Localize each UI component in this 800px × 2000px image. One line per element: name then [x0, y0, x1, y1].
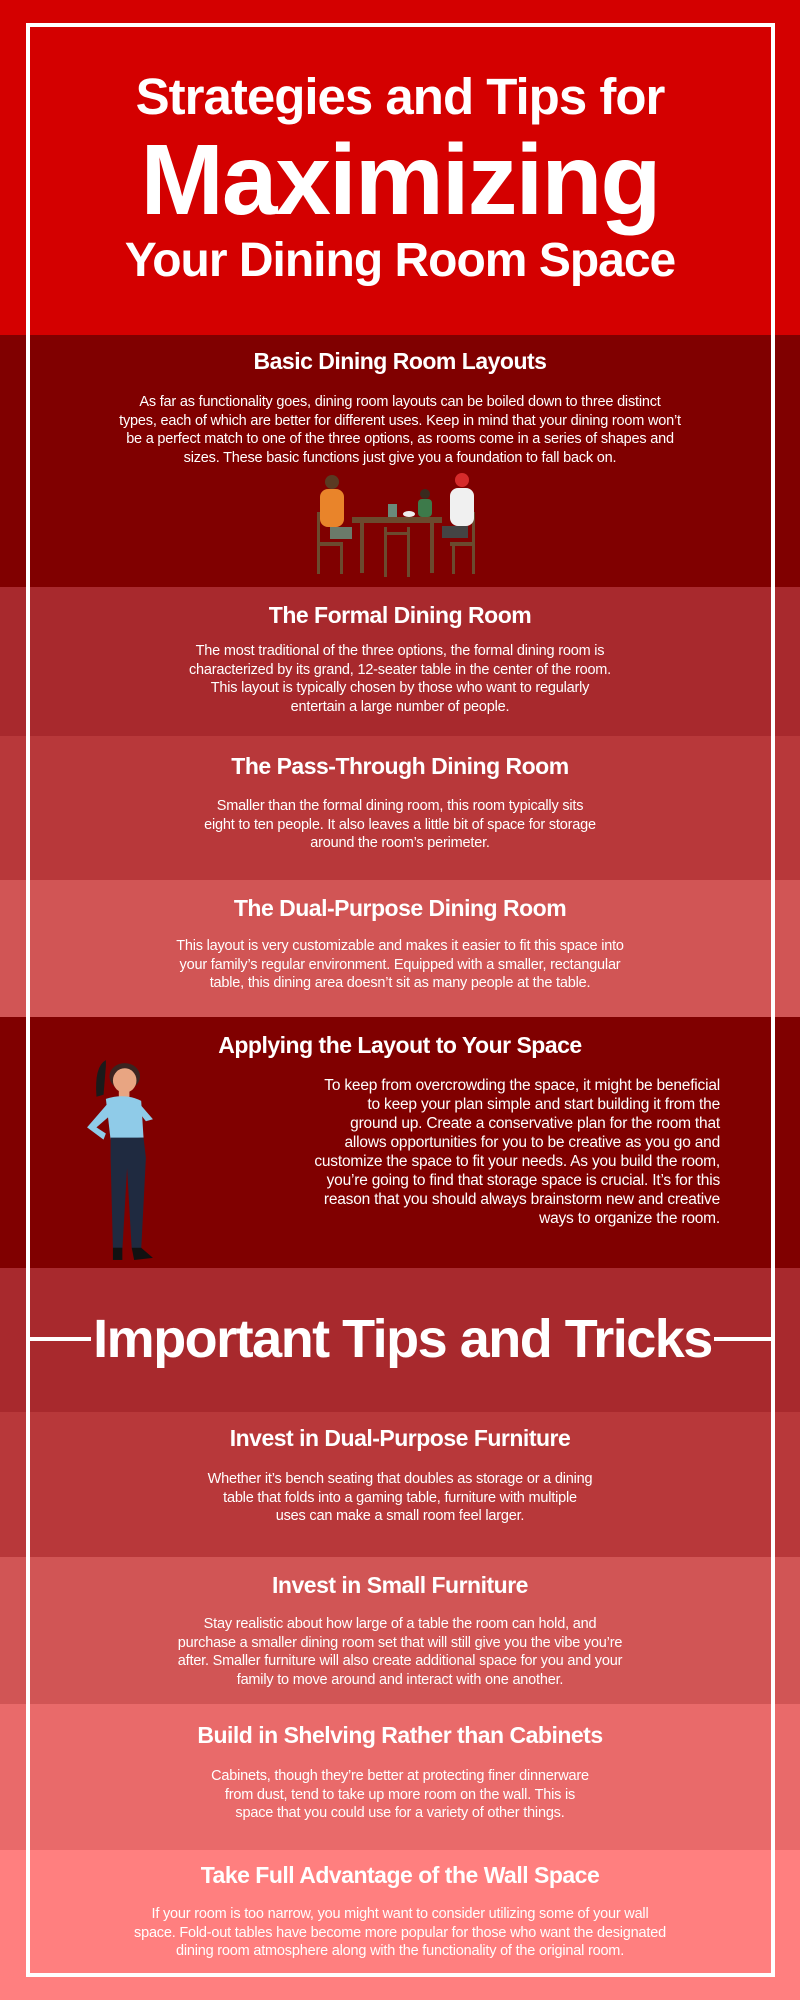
- text: basic layouts: be a perfect match to one of the three options, as rooms come in a series of shapes and: [126, 431, 674, 447]
- text: formal: [189, 643, 611, 715]
- text: dual-purpose: This layout is very customizable and makes it easier to fit this space into: [176, 938, 624, 954]
- text: wall space: dining room atmosphere along with the functionality of the original room.: [176, 1943, 624, 1959]
- title: Strategies and Tips for: [136, 68, 664, 125]
- illustration: family dining: [317, 473, 475, 577]
- text: formal: entertain a large number of people.: [291, 699, 509, 715]
- section title: important tips: Important Tips and Tricks: [93, 1309, 712, 1369]
- text: small furniture: [178, 1616, 622, 1688]
- text: formal: This layout is typically chosen by those who want to regularly: [211, 680, 589, 696]
- text: dual-purpose furniture: Whether it’s bench seating that doubles as storage or a dining: [208, 1471, 592, 1487]
- text: dual-purpose furniture: uses can make a small room feel larger.: [276, 1508, 524, 1524]
- text: small furniture: after. Smaller furniture will also create additional space for you and your: [178, 1653, 622, 1669]
- text: wall space: If your room is too narrow, you might want to consider utilizing some of your wall: [152, 1906, 648, 1922]
- text: dual-purpose: your family’s regular environment. Equipped with a smaller, rectangular: [180, 957, 620, 973]
- text: basic layouts: types, each of which are better for different uses. Keep in mind that your dining room won’t: [119, 413, 681, 429]
- text: dual-purpose furniture: [208, 1471, 592, 1524]
- text: basic layouts: As far as functionality goes, dining room layouts can be boiled down to three distinct: [139, 394, 661, 410]
- title: [125, 68, 675, 287]
- text: dual-purpose: [176, 938, 624, 991]
- text: dual-purpose: table, this dining area doesn’t sit as many people at the table.: [210, 975, 590, 991]
- illustration: thinking woman: [87, 1060, 153, 1260]
- heading: wall space: Take Full Advantage of the Wall Space: [201, 1862, 599, 1888]
- text: basic layouts: [119, 394, 681, 466]
- text: shelving: Cabinets, though they’re better at protecting finer dinnerware: [211, 1768, 589, 1784]
- text: applying layout: to keep your plan simple and start building it from the: [367, 1096, 720, 1113]
- heading: dual-purpose: The Dual-Purpose Dining Room: [234, 895, 566, 921]
- text: applying layout: ground up. Create a conservative plan for the room that: [350, 1115, 720, 1132]
- text: applying layout: reason that you should always brainstorm new and creative: [324, 1191, 720, 1208]
- text: formal: The most traditional of the three options, the formal dining room is: [196, 643, 604, 659]
- text: dual-purpose furniture: table that folds into a gaming table, furniture with multiple: [223, 1490, 577, 1506]
- text: pass-through: Smaller than the formal dining room, this room typically sits: [217, 798, 583, 814]
- text: pass-through: eight to ten people. It also leaves a little bit of space for storage: [204, 817, 596, 833]
- text: applying layout: ways to organize the room.: [539, 1210, 720, 1227]
- text: shelving: from dust, tend to take up more room on the wall. This is: [225, 1787, 575, 1803]
- title: Maximizing: [141, 124, 659, 236]
- text: pass-through: [204, 798, 596, 851]
- title: Your Dining Room Space: [125, 234, 675, 287]
- heading: basic layouts: Basic Dining Room Layouts: [254, 348, 546, 374]
- text: basic layouts: sizes. These basic functions just give you a foundation to fall back on.: [184, 450, 616, 466]
- heading: formal: The Formal Dining Room: [269, 602, 531, 628]
- text: wall space: space. Fold-out tables have become more popular for those who want the designated: [134, 1925, 666, 1941]
- heading: shelving: Build in Shelving Rather than Cabinets: [197, 1722, 603, 1748]
- text: applying layout: customize the space to fit your needs. As you build the room,: [314, 1153, 720, 1170]
- text: wall space: [134, 1906, 666, 1959]
- text: applying layout: [314, 1077, 720, 1227]
- heading: applying layout: Applying the Layout to Your Space: [218, 1032, 582, 1058]
- heading: small furniture: Invest in Small Furniture: [272, 1572, 528, 1598]
- text: small furniture: family to move around and interact with one another.: [237, 1672, 563, 1688]
- text: small furniture: Stay realistic about how large of a table the room can hold, and: [204, 1616, 596, 1632]
- text: shelving: space that you could use for a variety of other things.: [235, 1805, 565, 1821]
- text: applying layout: allows opportunities for you to be creative as you go and: [345, 1134, 720, 1151]
- heading: dual-purpose furniture: Invest in Dual-Purpose Furniture: [230, 1425, 570, 1451]
- text: applying layout: To keep from overcrowding the space, it might be beneficial: [324, 1077, 720, 1094]
- text: applying layout: you’re going to find that storage space is crucial. It’s for this: [327, 1172, 720, 1189]
- text: small furniture: purchase a smaller dining room set that will still give you the vibe you’re: [178, 1635, 622, 1651]
- text: pass-through: around the room’s perimeter.: [310, 835, 490, 851]
- text: formal: characterized by its grand, 12-seater table in the center of the room.: [189, 662, 611, 678]
- text: shelving: [211, 1768, 589, 1821]
- heading: pass-through: The Pass-Through Dining Room: [231, 753, 569, 779]
